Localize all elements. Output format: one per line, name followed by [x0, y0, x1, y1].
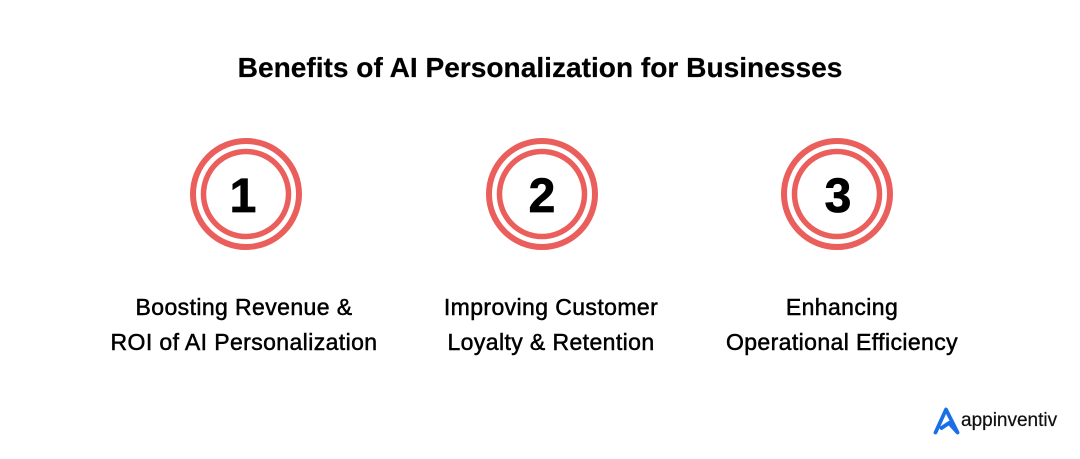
label 3 [726, 294, 958, 356]
circle 2 [489, 141, 595, 247]
circle 1 [193, 141, 299, 247]
logo wordmark: appinventiv [961, 410, 1057, 431]
label 2 [444, 294, 658, 356]
logo icon [934, 408, 960, 434]
circle 3: 3 [825, 170, 851, 223]
label 3: Operational Efficiency [726, 329, 958, 355]
logo: appinventiv [934, 408, 1058, 434]
circle 2: 2 [529, 170, 555, 223]
circle 3 [784, 141, 890, 247]
label 1: ROI of AI Personalization [111, 329, 377, 355]
label 2: Loyalty & Retention [447, 329, 655, 355]
label 3: Enhancing [786, 294, 898, 320]
label 1: Boosting Revenue & [136, 294, 352, 320]
label 2: Improving Customer [444, 294, 658, 320]
circle 1: 1 [230, 170, 256, 223]
title: Benefits of AI Personalization for Businesses [238, 52, 842, 83]
label 1 [111, 294, 377, 355]
